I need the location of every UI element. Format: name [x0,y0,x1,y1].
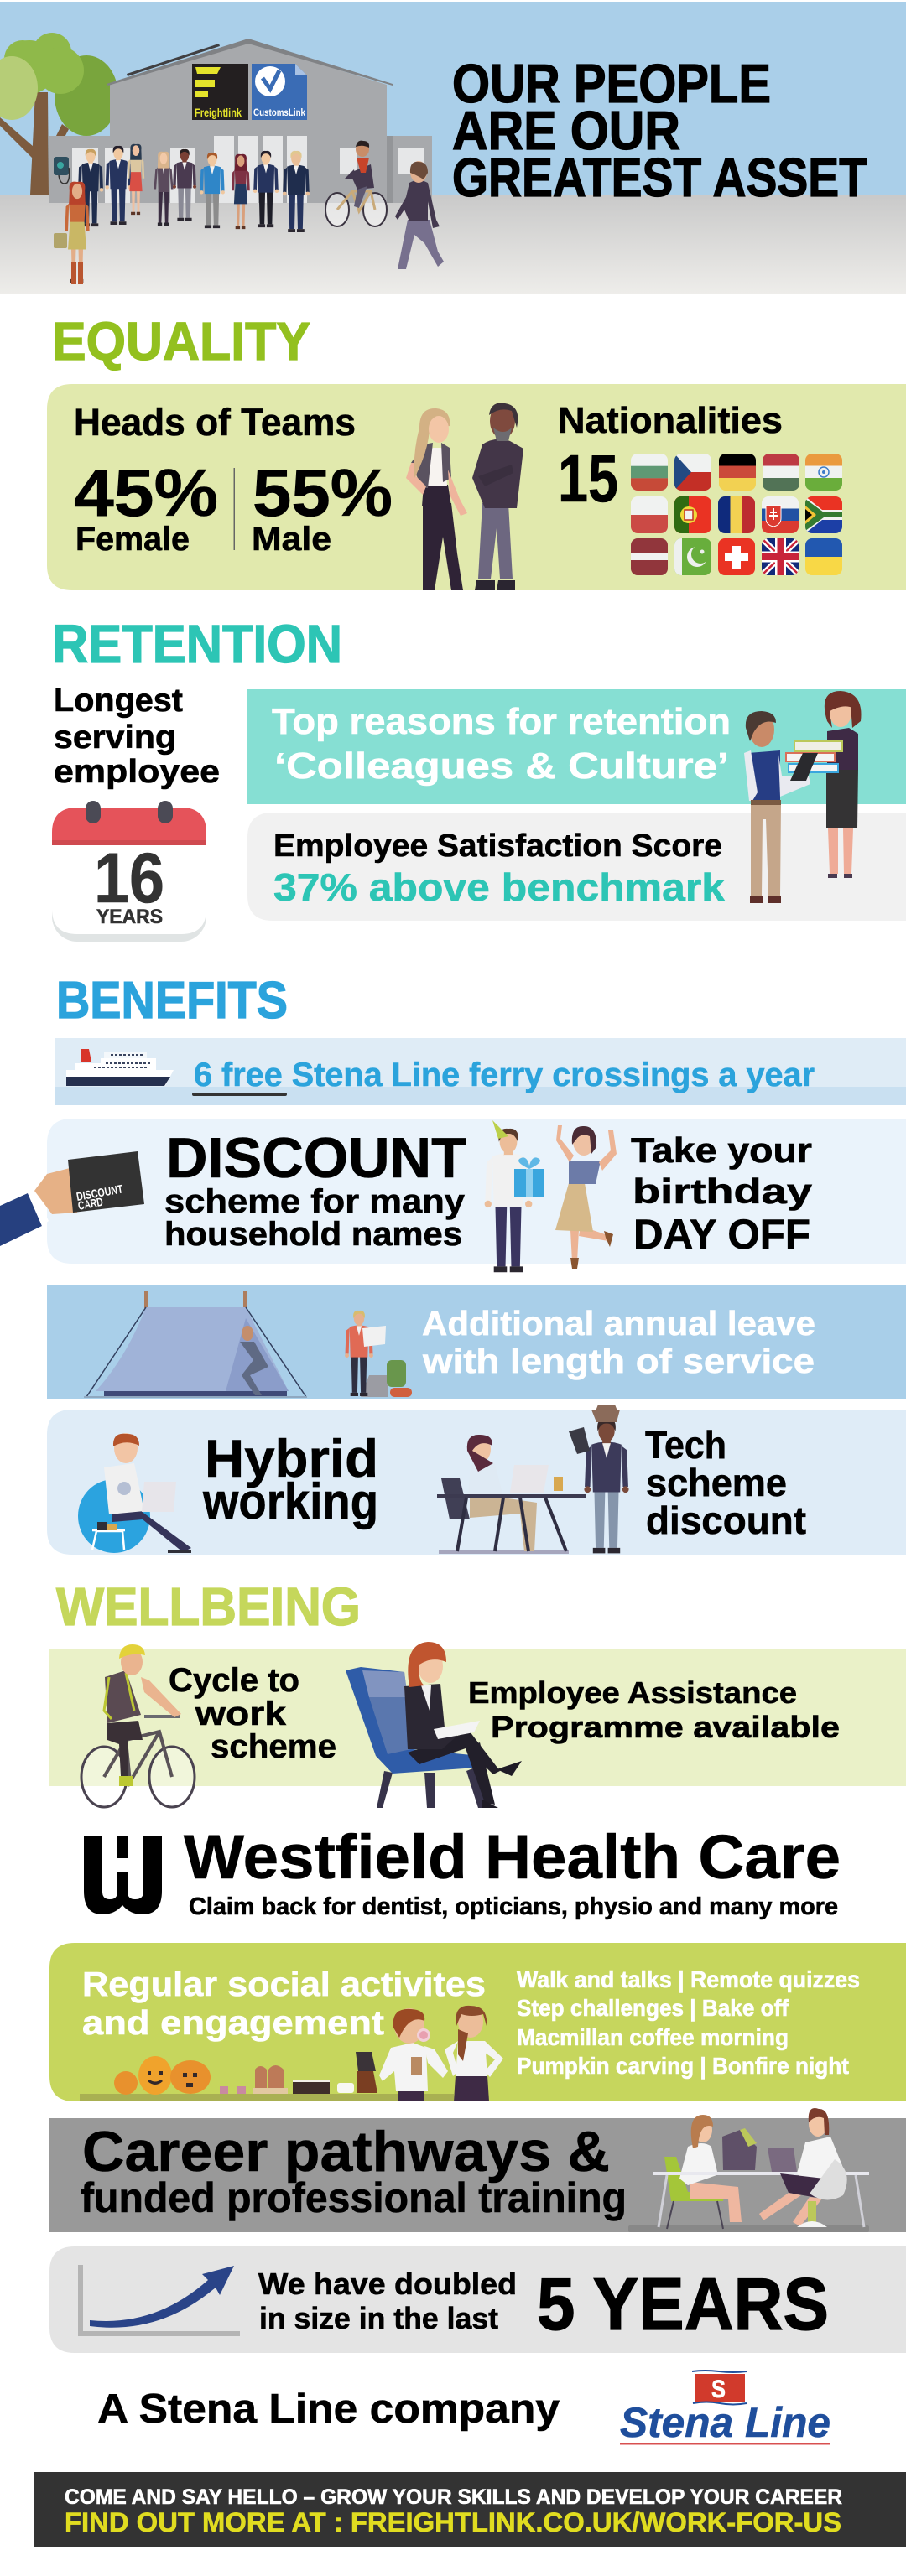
illustration: tent [84,1291,307,1398]
panel: employee satisfaction: 37% above benchmark [273,865,725,909]
woman and man standing [406,403,523,590]
icon: Westfield mark [84,1836,162,1914]
heading: benefits: BENEFITS [56,972,288,1030]
logo: Westfield Health: Claim back for dentist, opticians, physio and many more [189,1893,838,1920]
panel: discount and birthday: scheme for many [164,1183,466,1220]
panel: social activities: Regular social activites [82,1965,486,2003]
panel: annual leave [47,1285,906,1399]
illustration: woman jumping [555,1125,617,1269]
panel: equality [47,384,906,590]
panel: social activities: and engagement [82,2003,384,2042]
logo: Stena Line [620,2371,830,2446]
panel: discount and birthday: household names [164,1216,462,1253]
panel: cycle and EAP: scheme [211,1728,336,1765]
panel: discount and birthday: Take your [631,1130,812,1170]
panel: cycle and EAP: work [195,1696,287,1732]
nationalities [558,400,842,575]
icon: calendar 16 years: YEARS [96,906,163,928]
panel: employee satisfaction: Employee Satisfaction Score [273,828,722,864]
icon: calendar 16 years [52,801,206,942]
chart: growth arrow [78,2265,240,2336]
nationalities: Nationalities [558,400,783,441]
heads of teams stats: 55% [253,455,393,530]
panel: hybrid and tech: Tech [645,1423,726,1467]
woman walking with bag [54,182,90,284]
footer: COME AND SAY HELLO – GROW YOUR SKILLS AND DEVELOP YOUR CAREER [65,2485,842,2509]
panel: social activities [49,1943,906,2101]
icon: hand holding discount card: DISCOUNT [76,1182,124,1203]
panel: doubled in size [49,2246,906,2353]
title [452,53,867,208]
panel: annual leave: with length of service [422,1342,815,1380]
panel: hybrid and tech: Hybrid [205,1430,378,1488]
longest serving employee: serving [54,719,176,756]
heads of teams stats: Female [76,521,190,558]
illustration: woman at desk [437,1435,586,1554]
panel: discount and birthday: DAY OFF [633,1211,810,1258]
longest serving employee: Longest [54,683,183,719]
group of staff [78,144,310,232]
panel: hybrid and tech: discount [646,1498,806,1542]
panel: cycle and EAP: Employee Assistance [468,1675,797,1710]
heading: equality: EQUALITY [52,311,310,371]
panel: top reasons for retention: ‘Colleagues & Culture’ [274,745,729,787]
sign: Freightlink [192,64,248,120]
panel: career pathways [49,2108,906,2232]
panel: doubled in size: We have doubled [258,2267,517,2301]
flag grid [631,454,842,575]
icon: tree [0,33,118,203]
panel: hybrid and tech: working [202,1473,378,1530]
panel: discount and birthday: birthday [633,1171,813,1211]
nationalities: 15 [558,441,618,516]
panel: hybrid and tech [47,1405,906,1555]
panel: employee satisfaction [247,813,906,921]
icon: EV charger [54,157,70,184]
illustration: colleagues eating [379,2006,503,2101]
heading: wellbeing: WELLBEING [56,1576,361,1637]
panel: discount and birthday: DISCOUNT [166,1126,466,1190]
panel: top reasons for retention: Top reasons for retention [272,701,731,742]
shelf with pumpkins and cakes [80,2052,454,2101]
sign: CustomsLink [252,64,307,120]
footer [34,2472,906,2547]
activities list: Walk and talks | Remote quizzes [517,1966,860,1992]
panel: cycle and EAP [49,1642,906,1808]
sign: Freightlink: Freightlink [195,106,242,119]
activities list: Macmillan coffee morning [517,2024,789,2050]
illustration: hiker with map [345,1311,412,1397]
panel: doubled in size: 5 YEARS [537,2262,829,2345]
warehouse building [49,39,432,203]
logo: Westfield Health: Westfield Health Care [184,1822,841,1892]
icon: hand holding discount card [0,1151,144,1246]
person walking [395,161,444,269]
illustration: colleagues at desk [628,2108,869,2232]
panel: ferry crossings: 6 free Stena Line ferry crossings a year [194,1057,815,1093]
logo: Stena Line: S [711,2376,726,2403]
illustration: cyclist [81,1644,195,1807]
logo: Westfield Health [84,1822,841,1920]
longest serving employee: employee [54,754,220,790]
panel: hybrid and tech: scheme [646,1461,787,1504]
heads of teams stats: 45% [74,455,218,530]
activities list [517,1966,860,2079]
heads of teams stats: Heads of Teams [74,401,356,444]
icon: ferry [66,1049,174,1086]
footer: FIND OUT MORE AT : FREIGHTLINK.CO.UK/WORK-FOR-US [65,2507,841,2537]
title: OUR PEOPLE [452,53,771,114]
activities list: Step challenges | Bake off [517,1995,789,2021]
panel: cycle and EAP: Cycle to [169,1662,299,1699]
heads of teams stats: Male [252,521,331,558]
activities list: Pumpkin carving | Bonfire night [517,2053,849,2079]
heading: retention: RETENTION [52,614,342,674]
panel: career pathways: funded professional training [81,2174,627,2221]
panel: cycle and EAP: Programme available [491,1710,840,1744]
title: ARE OUR [452,100,680,161]
person on bicycle [325,141,387,226]
panel: ferry crossings [55,1038,906,1105]
icon: hand holding discount card: CARD [77,1195,104,1213]
longest serving employee [54,683,220,790]
icon: calendar 16 years: 16 [94,839,164,917]
illustration: man with tablet [569,1405,629,1553]
illustration: man with gift [485,1120,544,1272]
sign: CustomsLink: CustomsLink [253,106,305,118]
Stena Line company line: A Stena Line company [97,2386,560,2432]
panel: annual leave: Additional annual leave [422,1304,815,1343]
heads of teams stats [74,401,393,558]
illustration: colleagues with files [744,691,861,903]
illustration: person on beanbag with laptop [78,1433,191,1553]
panel: doubled in size: in size in the last [259,2301,498,2335]
hero panel [0,2,906,294]
panel: discount and birthday [0,1119,906,1272]
panel: top reasons for retention [247,689,906,804]
logo: Stena Line: Stena Line [620,2399,830,2446]
panel: career pathways: Career pathways & [82,2120,610,2184]
illustration: woman in blue armchair [346,1642,522,1808]
